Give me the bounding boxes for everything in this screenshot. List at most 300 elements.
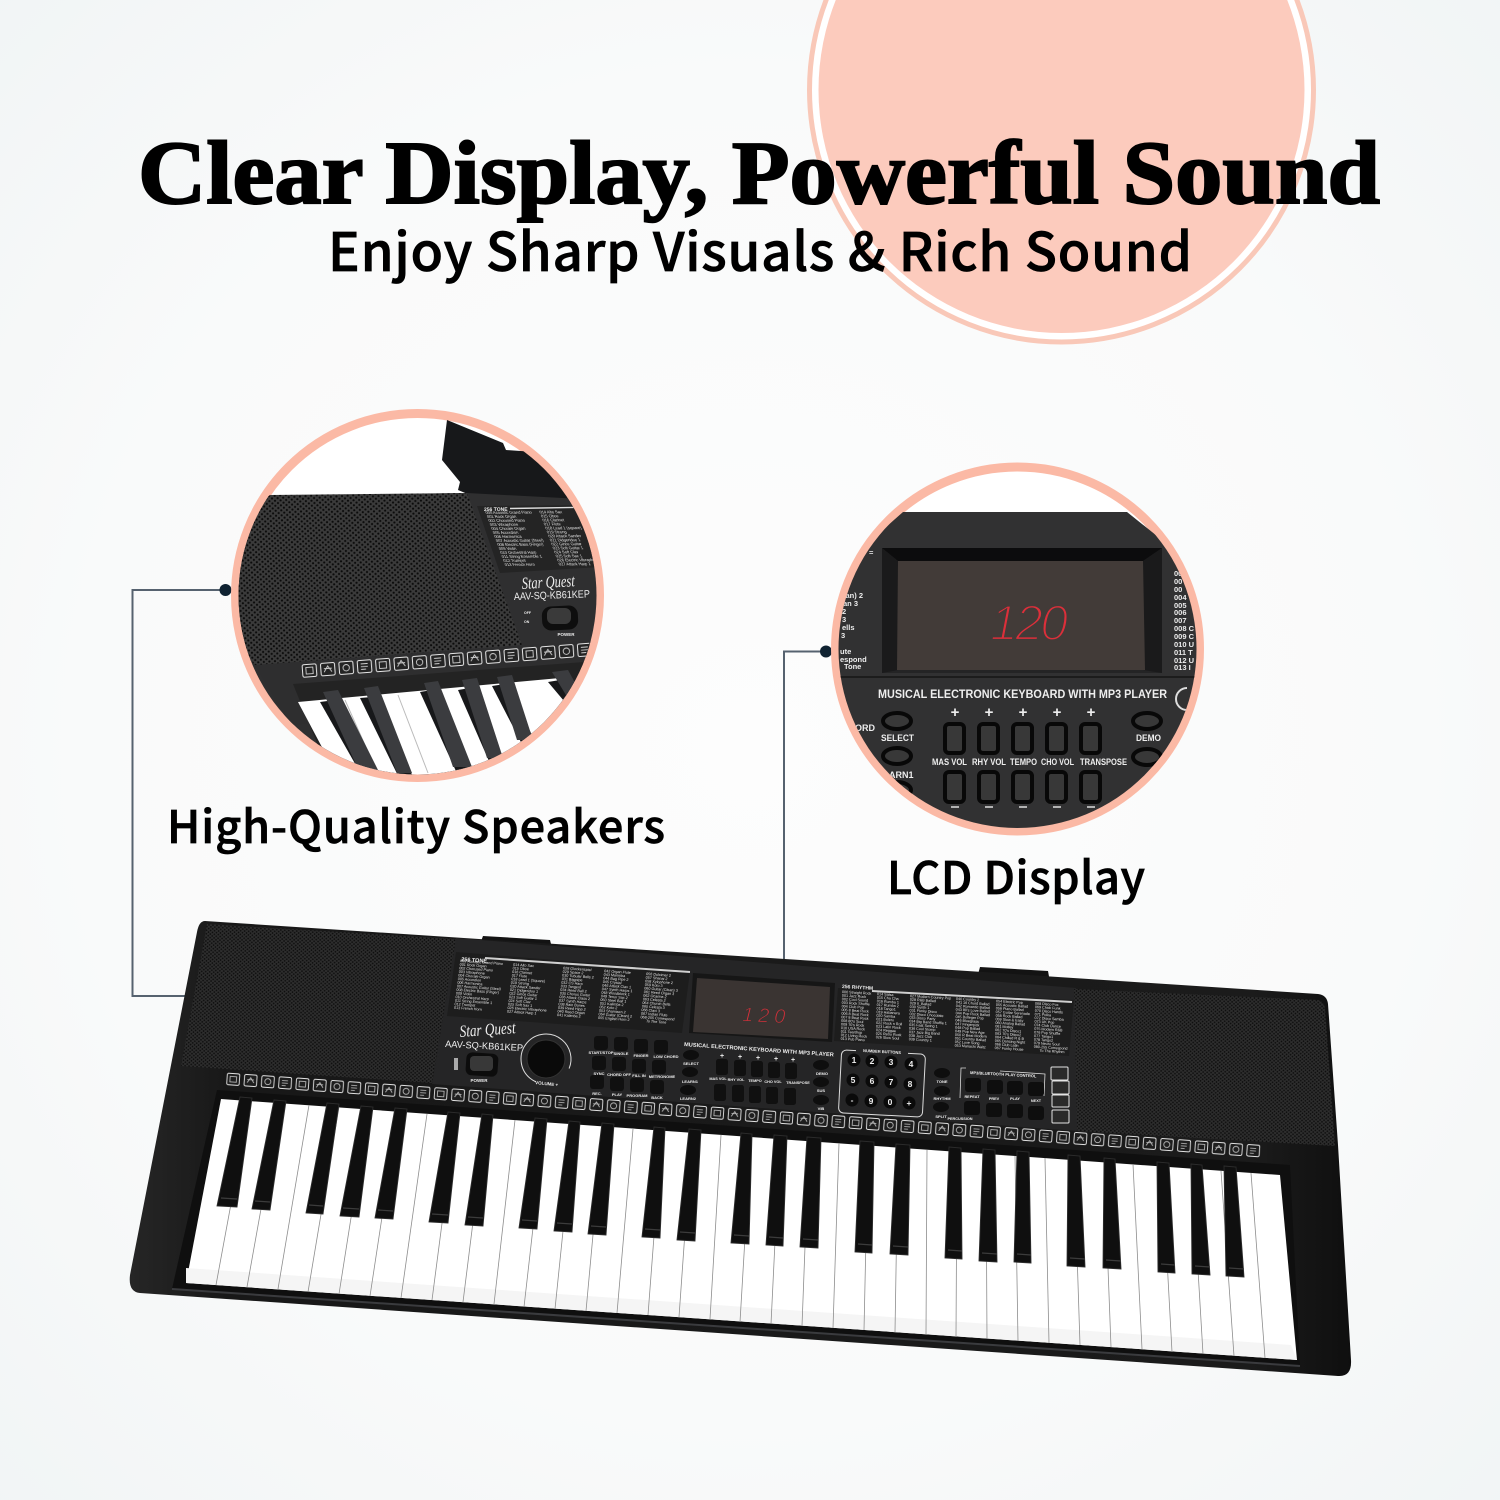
right cropped list: 009 C xyxy=(1174,632,1195,641)
left tone list: 042 Organ Flute xyxy=(604,969,631,975)
right rhythm list: 066 Club Latin xyxy=(995,1042,1019,1048)
right rhythm list: 024 Reggae xyxy=(876,1028,896,1033)
right rhythm list: 022 Rock n Roll xyxy=(876,1021,902,1026)
left tone list: 029 Space 2 xyxy=(562,970,584,975)
number buttons: 6 xyxy=(870,1076,875,1086)
right rhythm list: 053 Mariachi Waltz xyxy=(955,1044,986,1050)
tone list block: 009 Violin xyxy=(498,546,518,551)
tone list block: 026 Electric Vibraphone xyxy=(556,557,601,562)
centre panel xyxy=(432,938,1078,1131)
right rhythm list: 026 Slow Soul xyxy=(876,1035,900,1041)
oval button labels: SELECT xyxy=(683,1061,699,1066)
volume fader plus signs: + xyxy=(791,1057,795,1064)
left cropped list: an 3 xyxy=(843,599,858,608)
number buttons: - xyxy=(851,1095,854,1105)
left tone list: 007 Acoustic Guitar (Steel) xyxy=(457,984,501,991)
right rhythm list: 042 Romantic Ballad xyxy=(956,1004,990,1010)
tone list block: 012 Trumpet xyxy=(502,558,527,563)
icon strip xyxy=(300,642,590,679)
left tone list: 002 Chorused Piano xyxy=(459,966,493,973)
style button labels: SINGLE xyxy=(614,1051,629,1056)
volume fader plus signs: + xyxy=(774,1056,778,1063)
oval button labels: VIB xyxy=(818,1106,824,1111)
right rhythm list: 009 70's Rock xyxy=(841,1022,864,1028)
decorative peach circle xyxy=(810,0,1314,342)
oval button labels: SELECT xyxy=(881,733,914,743)
key front shading xyxy=(186,1268,1297,1360)
left tone list: 050 Steel Ball 1 xyxy=(600,998,627,1004)
left tone list: 062 Ocarina 2 xyxy=(643,994,667,999)
left tone list: 054 Guitar (Clean) 2 xyxy=(598,1012,632,1019)
number buttons: + xyxy=(907,1098,912,1108)
tone list block: 024 Soft Clav xyxy=(553,549,580,554)
power switch: ON xyxy=(524,620,530,624)
left tone list: 005 Accordion xyxy=(458,977,481,983)
right rhythm list: 059 Slow & Easy xyxy=(995,1017,1024,1023)
white keys xyxy=(186,1099,1297,1360)
left tone list: 064 Church Bells xyxy=(642,1001,671,1007)
right rhythm list: 016 Rumba 1 xyxy=(877,999,899,1005)
right rhythm list: 040 Country 2 xyxy=(956,997,979,1002)
right cropped list: 007 xyxy=(1174,616,1187,625)
left tone list: 048 Woodblock 1 xyxy=(601,991,630,997)
number buttons xyxy=(838,1047,926,1117)
right rhythm list: 018 Tango1 xyxy=(877,1007,896,1012)
left tone list: 037 Synth Harps xyxy=(559,999,587,1005)
tone list block: 007 Acoustic Guitar (Steel) xyxy=(495,538,545,543)
volume fader plus signs xyxy=(720,1053,795,1064)
black key caps xyxy=(221,1198,1244,1269)
left tone list: 028 Glockenspiel xyxy=(563,966,592,972)
fader labels: MAS VOL xyxy=(709,1077,727,1081)
right rhythm list: 075 Modern R&B xyxy=(1034,1027,1063,1033)
tone list block: 002 Chorused Piano xyxy=(488,518,526,523)
left cropped list: Tone xyxy=(844,662,861,671)
tone list block: 005 Accordion xyxy=(492,530,520,535)
LCD bezel xyxy=(882,548,1162,673)
power switch: POWER xyxy=(470,1078,488,1083)
right rhythm list: 011 Teardrop xyxy=(841,1030,862,1035)
tone list block: 001 Rock Organ xyxy=(486,514,518,519)
oval button labels: DEMO xyxy=(1136,733,1161,743)
right rhythm list: 065 Dancing Night xyxy=(995,1039,1025,1045)
left tone list: 026 Electric Vibraphone xyxy=(507,1006,547,1013)
right rhythm list: 019 Habanera xyxy=(876,1010,901,1016)
left tone list: 020 Attack Sander xyxy=(510,984,542,990)
left tone list: 018 Lead 1 (Square) xyxy=(511,977,545,983)
left tone list: 059 Koto 3 xyxy=(644,983,663,988)
right rhythm list: 017 Rumba 2 xyxy=(877,1003,899,1008)
left tone list: 058 Xylophone 2 xyxy=(645,979,673,985)
left tone list: 001 Rock Organ xyxy=(459,963,487,968)
right rhythm list: 069 Chick Funk xyxy=(1035,1005,1061,1011)
left tone list: 065 Celesta 3 xyxy=(642,1004,665,1010)
right rhythm list: 046 Bluegrass xyxy=(955,1018,979,1024)
left tone list: 032 CS Harp xyxy=(561,981,583,986)
right rhythm list: 078 Tango2 xyxy=(1034,1038,1053,1043)
right rhythm list: 027 Modern Country Pop xyxy=(910,994,951,1001)
tone list block: 006 Harmonica xyxy=(493,534,523,539)
right rhythm list: 032 Disco Chocolate xyxy=(909,1012,944,1018)
fader labels: CHO VOL xyxy=(764,1080,782,1084)
right cropped list: 005 xyxy=(1174,601,1187,610)
heading: High-Quality Speakers: High-Quality Speakers xyxy=(167,791,665,856)
MP3 controls: REPEAT xyxy=(964,1095,980,1099)
right rhythm list: 076 Pop Shuffle xyxy=(1034,1030,1060,1036)
MP3 controls: MP3/BLUETOOTH PLAY CONTROL xyxy=(970,1070,1037,1079)
right rhythm list: 012 Living Rock xyxy=(841,1033,867,1039)
right rhythm list: 038 Jazz Club xyxy=(909,1034,932,1039)
music stand piece xyxy=(442,420,590,520)
minus signs xyxy=(951,806,1095,808)
left tone list: 049 Tenor Sax 2 xyxy=(601,994,628,1000)
right rhythm list: 073 UK Pop xyxy=(1034,1020,1054,1025)
key well xyxy=(293,662,584,774)
left tone list: 063 Celesta 2 xyxy=(643,997,666,1003)
plus signs: + xyxy=(985,704,994,721)
volume knob: VOLUME + xyxy=(535,1080,559,1087)
right rhythm list: 068 Disco Fox xyxy=(1035,1002,1059,1007)
fader labels: TRANSPOSE xyxy=(786,1081,810,1085)
right rhythm list: 010 USA Rock xyxy=(841,1026,865,1031)
logo: Star Quest xyxy=(459,1018,517,1041)
white key separators xyxy=(216,1101,1265,1358)
tone list block: 000 Acoustic Grand Piano xyxy=(485,510,533,515)
right cropped list: 008 C xyxy=(1174,624,1195,633)
right rhythm list: 058 Rock Ballad xyxy=(996,1014,1022,1019)
left cropped list: ells xyxy=(842,623,855,632)
right rhythm list: 004 Club Pop xyxy=(842,1004,864,1010)
right rhythm list: 006 8 Beat Rock xyxy=(841,1012,869,1017)
power switch xyxy=(454,1052,499,1083)
model number: AAV-SQ-KB61KEP xyxy=(514,588,590,603)
number buttons: 2 xyxy=(870,1056,875,1066)
MP3 controls: NEXT xyxy=(1031,1099,1042,1103)
right rhythm list: 071 Polka xyxy=(1035,1012,1052,1017)
left cropped list xyxy=(840,548,874,671)
left cropped list: 2 xyxy=(842,607,846,616)
left tone list: 053 Shamisen 2 xyxy=(599,1009,626,1015)
side oval buttons left and right xyxy=(680,1050,950,1112)
tone list block xyxy=(477,505,603,573)
black keys xyxy=(217,1097,1244,1277)
right rhythm list: 036 Cool Stomp xyxy=(909,1026,936,1032)
left tone list: 010 Orchestral Harp xyxy=(455,995,489,1001)
tone list block: 022 Gince Guitar xyxy=(550,541,583,546)
plus signs: + xyxy=(951,704,960,721)
right rhythm list: 054 Electric Pop xyxy=(996,999,1023,1005)
heading: LCD Display: LCD Display xyxy=(887,842,1145,907)
volume fader plus signs: + xyxy=(756,1055,760,1062)
tone list block: 016 Clarinet xyxy=(542,517,566,522)
left cropped list: 3 xyxy=(841,631,845,640)
panel body xyxy=(838,512,1196,828)
right rhythm list: 055 Acoustic Ballad xyxy=(996,1003,1028,1009)
connector: speakers xyxy=(132,584,232,996)
LCD screen xyxy=(897,561,1145,670)
right rhythm list: 063 70's Disco2 xyxy=(995,1032,1021,1037)
left speaker grille xyxy=(181,924,456,1083)
left tone list: 052 Koto 2 xyxy=(599,1005,618,1010)
number buttons: 1 xyxy=(852,1055,857,1065)
music stand clips xyxy=(480,936,1050,982)
MP3 controls: PLAY xyxy=(1010,1097,1020,1101)
right rhythm list: 048 Pop Ballad xyxy=(955,1026,980,1031)
oval button labels: SPLIT xyxy=(935,1114,947,1119)
right rhythm list: 007 8 Beat Rock xyxy=(841,1015,869,1021)
volume fader plus signs: + xyxy=(720,1053,724,1060)
logo: Star Quest xyxy=(521,571,576,593)
right rhythm list: 047 Fingerpick xyxy=(955,1022,980,1027)
left tone list: 013 French Horn xyxy=(454,1006,482,1012)
right rhythm list: 060 Analog Ballad xyxy=(995,1021,1025,1027)
right rhythm list: 256 RHYTHM xyxy=(842,984,873,992)
right rhythm list: 034 Big Band Shuffle 1 xyxy=(909,1019,947,1026)
right rhythm list: 021 Bolero xyxy=(876,1017,894,1022)
right rhythm list: 051 Country Ballad xyxy=(955,1036,986,1042)
style button labels: METRONOME xyxy=(649,1074,676,1079)
left tone list: 061 Reed Organ 3 xyxy=(644,990,674,996)
oval button labels: LEARN2 xyxy=(680,1096,697,1101)
right rhythm list: 049 Pop New Age xyxy=(955,1029,985,1035)
left tone list: 041 Kalimba 2 xyxy=(557,1013,581,1019)
right rhythm list: 020 Samba xyxy=(876,1014,896,1019)
power switch: OFF xyxy=(524,611,532,615)
style button labels: CHORD OFF xyxy=(607,1072,631,1077)
fader labels: TRANSPOSE xyxy=(1080,757,1127,767)
upper fader buttons xyxy=(945,724,1100,753)
left tone list: 009 Violin xyxy=(456,991,472,997)
keyboard xyxy=(130,921,1351,1376)
MP3 controls xyxy=(947,1068,1045,1121)
left tone list: 038 Rain Bones xyxy=(558,1002,585,1008)
panel: speaker close-up circle xyxy=(231,409,604,782)
tone list block: 013 French Horn xyxy=(504,562,536,567)
left cropped list: 3 xyxy=(842,615,846,624)
left tone list: 044 Bag Pipe 2 xyxy=(603,976,629,982)
left tone list: 021 Didgeridoo 1 xyxy=(510,988,538,994)
left tone list: 004 Chorale Organ xyxy=(458,973,490,980)
LCD display: 120 xyxy=(742,1004,786,1028)
fader labels: TEMPO xyxy=(1010,757,1037,767)
left tone list: 024 Soft Clav xyxy=(508,999,531,1004)
right rhythm list: 031 Funky Disco xyxy=(910,1008,937,1014)
mode icons xyxy=(1051,1067,1069,1123)
tone list block: 023 Soft Guitar 1 xyxy=(552,545,585,550)
right rhythm list: 052 Love Song xyxy=(955,1040,980,1046)
right rhythm list: 079 Neuro Soul xyxy=(1034,1041,1060,1047)
right cropped list: 004 xyxy=(1174,593,1187,602)
right rhythm list: 062 70's Disco1 xyxy=(995,1028,1021,1034)
tone list block: 021 Didgeridoo 1 xyxy=(549,537,582,542)
tone list block: 003 Vibraphone xyxy=(489,522,520,527)
left tone list: 047 Synth Harps 1 xyxy=(602,987,633,993)
right rhythm list: 057 Guitar Serenade xyxy=(996,1010,1030,1016)
oval button labels xyxy=(680,1061,951,1119)
right rhythm list: 030 Synth 1 xyxy=(910,1005,929,1010)
left tone list: 039 Reed Hipp 2 xyxy=(558,1006,586,1012)
oval button labels: LEARN1 xyxy=(682,1079,699,1084)
tone list block: 256 TONE xyxy=(484,507,508,513)
panel: LCD close-up circle xyxy=(825,467,1210,840)
tone list block: 011 String Ensemble 1 xyxy=(501,554,543,559)
front lip xyxy=(172,1289,1300,1366)
left tone list: 045 Crystal xyxy=(602,980,622,985)
right rhythm list: 070 Disco Hands xyxy=(1035,1009,1063,1014)
right rhythm list: 029 II_Ballad xyxy=(910,1001,931,1007)
right cropped list: 010 U xyxy=(1174,640,1194,649)
right rhythm list: To The Rhythm xyxy=(1040,1049,1065,1054)
MP3 controls: PREV xyxy=(989,1097,1000,1101)
left tone list: 035 Chorus Guitar xyxy=(560,991,591,998)
right cropped list xyxy=(1174,569,1195,672)
right rhythm list: 014 Salsa xyxy=(877,992,894,997)
right rhythm list: 043 80's Love Ballad xyxy=(956,1008,990,1014)
subtitle: Enjoy Sharp Visuals & Rich Sound xyxy=(328,211,1192,287)
right rhythm list: 008 80's Soul xyxy=(841,1019,864,1024)
left tone list: 008 Electric Bass (Finger) xyxy=(456,988,499,995)
style button labels: PROGRAM xyxy=(627,1093,648,1098)
left tone list: 027 Attack Harp 1 xyxy=(507,1010,537,1016)
left tone list: 006 Harmonica xyxy=(457,981,484,986)
fader labels xyxy=(709,1077,810,1085)
button strip body xyxy=(283,640,591,725)
right cropped list: 006 xyxy=(1174,608,1187,617)
left tone list: 019 Strong xyxy=(511,981,529,986)
tone list block: 014 Alto Sax xyxy=(539,509,564,514)
style button labels: SYNC xyxy=(593,1071,605,1076)
style button labels: FILL IN xyxy=(632,1073,646,1078)
white keys xyxy=(298,678,568,774)
oval button labels: ARN1 xyxy=(889,770,914,780)
left tone list: 031 Bagpipe xyxy=(561,977,583,982)
oval button labels: ORD xyxy=(855,723,876,733)
right cropped list: 013 I xyxy=(1174,663,1191,672)
left tone list: 036 Attack Class 2 xyxy=(559,995,590,1001)
right rhythm list: 005 8 Beat Rock xyxy=(841,1008,869,1014)
right cropped list: 00 xyxy=(1174,569,1182,578)
left tone list: 023 Soft Guitar 1 xyxy=(509,995,537,1001)
right cropped list: 011 T xyxy=(1174,648,1193,657)
MP3 controls: PERCUSSION xyxy=(947,1117,973,1121)
left tone list: 256 TONE xyxy=(461,957,488,965)
right rhythm list: 045 Bolleger Pop xyxy=(955,1015,984,1021)
left tone list: 043 Marimba xyxy=(603,973,626,978)
left tone list: 060 Guitar (Clean) 3 xyxy=(644,986,678,993)
oval button labels: DEMO xyxy=(816,1071,828,1076)
left tone list: 000 Acoustic Grand Piano xyxy=(460,959,503,966)
left tone list: 067 Indian Flute xyxy=(641,1012,668,1017)
left tone list: 025 Soft Sax 1 xyxy=(508,1002,533,1008)
oval button labels: RHYTHM xyxy=(933,1096,951,1101)
oval button labels xyxy=(855,723,1161,780)
left tone list: 003 Vibraphone xyxy=(458,970,485,976)
tone list block: 010 Orchestral Harp xyxy=(499,550,538,555)
number buttons: 7 xyxy=(889,1077,894,1087)
right rhythm list: 023 Latin Rock xyxy=(876,1025,901,1030)
style button labels xyxy=(589,1050,679,1100)
left tone list: 057 Shanai 2 xyxy=(645,976,668,981)
fader labels: TEMPO xyxy=(748,1079,762,1083)
right cropped list: 00 xyxy=(1174,585,1182,594)
LCD display xyxy=(689,973,835,1042)
left tone list: 016 Clarinet xyxy=(512,970,532,975)
left tone list: 033 Tangent xyxy=(561,984,581,990)
right rhythm list: 041 16 Chord Ballad xyxy=(956,1000,990,1006)
left tone list: To The Tone xyxy=(646,1019,667,1025)
right rhythm list: 050 R Beat Modern xyxy=(955,1033,987,1039)
left tone list: 014 Alto Sax xyxy=(513,963,534,968)
left cropped list: espond xyxy=(840,655,867,664)
tone list block: 017 Flute xyxy=(543,521,562,526)
lower fader buttons xyxy=(945,772,1100,802)
right rhythm list: 061 Motley xyxy=(995,1024,1014,1030)
fader buttons xyxy=(714,1059,797,1105)
left tone list: 066 Clavi 3 xyxy=(641,1008,660,1013)
fader labels: RHY VOL xyxy=(728,1078,745,1082)
panel body xyxy=(238,493,596,774)
speaker grille xyxy=(230,493,522,665)
plus signs xyxy=(951,708,1095,716)
number buttons: 9 xyxy=(869,1096,874,1106)
left tone list xyxy=(447,952,690,1033)
tone list block: 025 Soft Sax 1 xyxy=(555,553,583,558)
oval button labels: SUS xyxy=(817,1088,825,1093)
right rhythm list: 080-255 Correspond xyxy=(1034,1045,1068,1051)
fader labels: MAS VOL xyxy=(932,757,967,767)
right rhythm list: 013 Pub Piano xyxy=(841,1037,865,1042)
oval button labels: TONE xyxy=(936,1079,948,1084)
plus signs: + xyxy=(1053,704,1062,721)
right rhythm list: 028 R&B Ballad xyxy=(910,998,936,1003)
keyboard body xyxy=(130,921,1351,1376)
style button labels: FINGER xyxy=(633,1053,649,1058)
left tone list: 017 Flute xyxy=(511,974,527,979)
right rhythm list xyxy=(834,984,1074,1056)
left cropped list: ute xyxy=(840,647,851,656)
right rhythm list: 033 Disco Party xyxy=(909,1016,936,1021)
icon strip xyxy=(225,1072,1263,1159)
key well xyxy=(172,1090,1300,1366)
left tone list: 055 English Horn 2 xyxy=(598,1016,630,1022)
left tone list: 011 String Ensemble 1 xyxy=(455,999,492,1005)
title: Clear Display, Powerful Sound xyxy=(138,124,1380,223)
left tone list: 022 Gince Guitar xyxy=(509,992,538,998)
power switch xyxy=(524,605,579,637)
right rhythm list: 056 Piano Ballad xyxy=(996,1006,1024,1012)
left tone list: 040 Reed Organ xyxy=(557,1009,585,1015)
plus signs: + xyxy=(1087,704,1096,721)
plus signs: + xyxy=(1019,704,1028,721)
right rhythm list: 074 Club Dance xyxy=(1034,1023,1061,1029)
number buttons: 8 xyxy=(908,1079,913,1089)
number buttons: 5 xyxy=(851,1075,856,1085)
tone list block: 004 Chorale Organ xyxy=(490,526,527,531)
black keys xyxy=(320,670,574,774)
left cropped list: (an) 2 xyxy=(843,591,863,600)
tempo readout: 120 xyxy=(990,595,1068,651)
model number: AAV-SQ-KB61KEP xyxy=(445,1039,523,1054)
left tone list: 015 Oboe xyxy=(512,966,529,971)
right rhythm list: 003 Rock Shuffle xyxy=(842,1001,870,1006)
style button labels: LOW CHORD xyxy=(653,1054,679,1059)
left tone list: 056 Dulcimer 2 xyxy=(646,972,671,978)
right rhythm list: 001 Jazz Rock xyxy=(842,994,866,999)
power switch: POWER xyxy=(557,632,575,637)
left cropped list: = xyxy=(869,548,874,557)
panel heading: MUSICAL ELECTRONIC KEYBOARD WITH MP3 PLAYER xyxy=(684,1042,834,1058)
left tone list: 068-255 Correspond xyxy=(640,1015,675,1022)
